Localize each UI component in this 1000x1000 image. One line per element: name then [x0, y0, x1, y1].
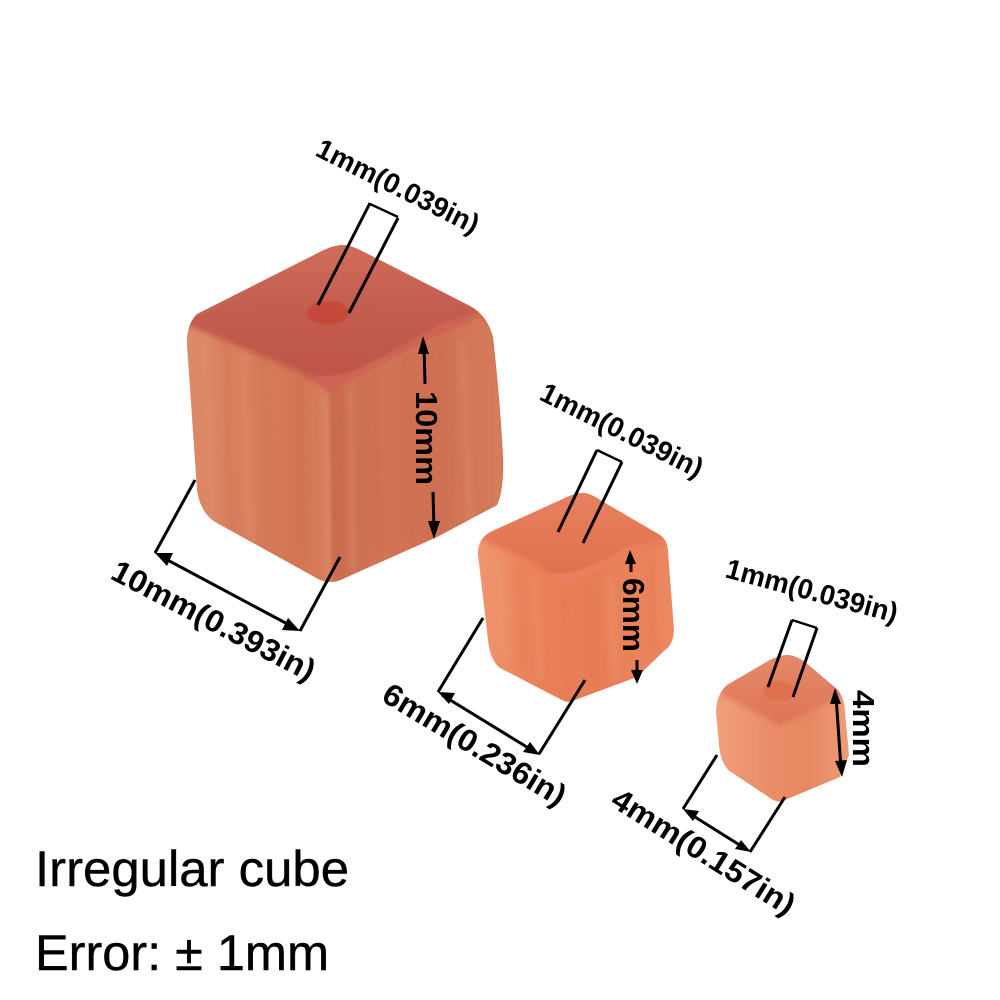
large height dimension	[409, 336, 444, 539]
small hole dimension	[722, 553, 901, 697]
label: medium width: 6mm(0.236in)	[376, 676, 573, 813]
caption: shape: Irregular cube	[35, 841, 349, 897]
medium hole dimension	[535, 377, 708, 543]
medium width dimension	[376, 618, 585, 813]
label: small hole: 1mm(0.039in)	[722, 553, 901, 629]
small width dimension	[605, 755, 802, 922]
small cube	[715, 650, 849, 802]
caption: tolerance: Error: ± 1mm	[35, 925, 329, 981]
label: large height: 10mm	[409, 391, 444, 485]
medium height dimension	[616, 550, 651, 684]
label: large hole: 1mm(0.039in)	[311, 133, 484, 240]
label: small width: 4mm(0.157in)	[605, 781, 802, 922]
label: small height: 4mm	[846, 690, 881, 767]
label: medium hole: 1mm(0.039in)	[535, 377, 708, 484]
small height dimension	[830, 688, 881, 777]
large width dimension	[106, 480, 340, 688]
label: large width: 10mm(0.393in)	[106, 553, 322, 688]
medium cube	[478, 488, 675, 702]
large hole dimension	[311, 133, 484, 313]
large cube	[180, 240, 503, 582]
label: medium height: 6mm	[616, 578, 651, 652]
